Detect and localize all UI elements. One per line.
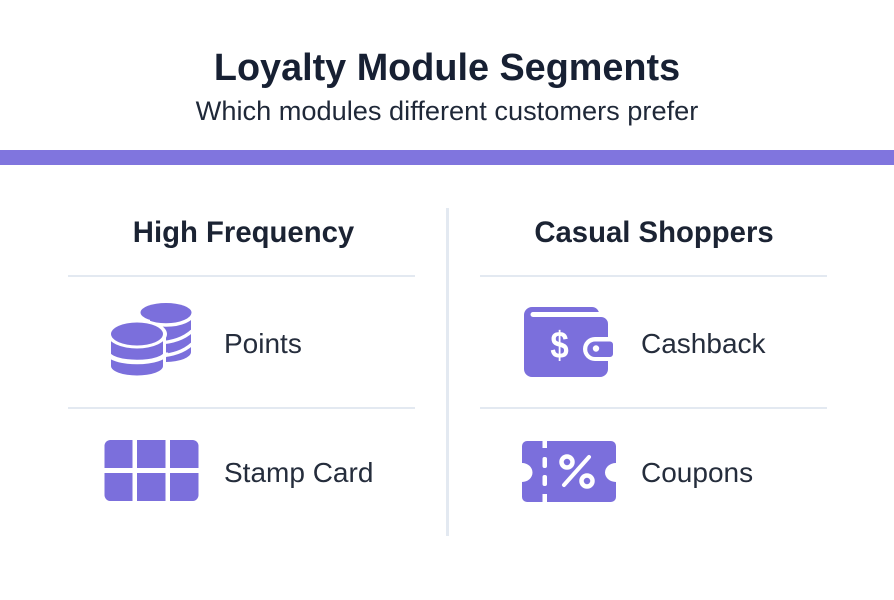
subtitle: Which modules different customers prefer	[196, 95, 698, 126]
icon: coupon ticket	[522, 441, 616, 502]
label: Points: Points	[224, 328, 302, 359]
column divider	[446, 208, 449, 536]
title: Loyalty Module Segments	[214, 47, 680, 89]
heading: Casual Shoppers: Casual Shoppers	[534, 216, 774, 249]
header band	[0, 150, 894, 165]
label: Coupons: Coupons	[641, 457, 753, 488]
label: Cashback: Cashback	[641, 328, 766, 359]
label: Stamp Card: Stamp Card	[224, 457, 373, 488]
icon: stamp card	[104, 440, 198, 501]
icon: coins	[111, 303, 192, 376]
heading: High Frequency: High Frequency	[133, 216, 354, 249]
icon: wallet: $	[550, 324, 569, 367]
icon: wallet	[524, 307, 613, 377]
